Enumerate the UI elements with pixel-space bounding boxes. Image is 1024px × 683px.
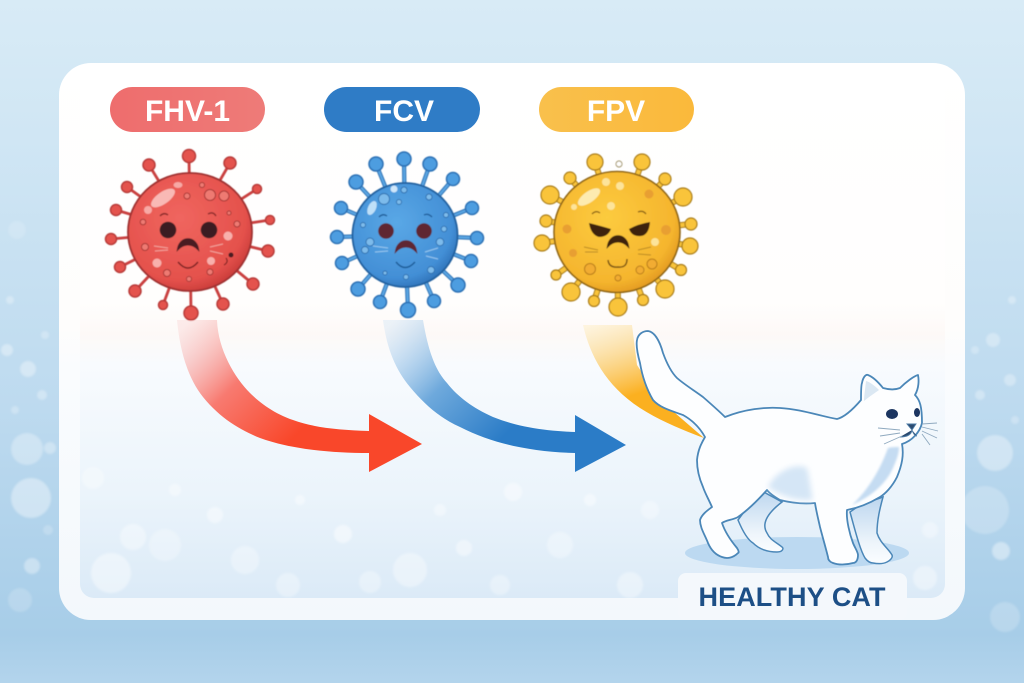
label: FHV-1 — [110, 87, 265, 132]
arrow: FHV-1 to cat — [177, 320, 422, 472]
icon: yellow virus FPV — [534, 154, 698, 316]
cat chest shading — [852, 447, 899, 505]
far front leg — [850, 497, 892, 564]
label: HEALTHY CAT: HEALTHY CAT — [698, 582, 886, 612]
label: FPV — [539, 87, 694, 132]
arrow: FCV to cat — [383, 320, 626, 472]
label: FPV: FPV — [587, 95, 645, 128]
cat eyes — [886, 409, 898, 419]
label: FCV: FCV — [374, 95, 434, 128]
arrow: FPV to cat — [583, 325, 704, 438]
panel: main card — [59, 63, 965, 620]
cat belly shading — [768, 466, 813, 500]
cat nose and mouth — [900, 424, 917, 437]
label: FHV-1: FHV-1 — [145, 95, 230, 128]
icon: blue virus FCV — [330, 152, 484, 318]
cat ground shadow — [685, 537, 909, 569]
label: HEALTHY CAT — [678, 573, 907, 620]
cat body — [637, 331, 922, 564]
cat whiskers — [878, 423, 938, 445]
cat inner ear — [864, 381, 879, 401]
icon: healthy cat — [637, 331, 938, 569]
far hind leg — [738, 490, 783, 552]
label: FCV — [324, 87, 480, 132]
icon: red virus FHV-1 — [106, 150, 274, 320]
